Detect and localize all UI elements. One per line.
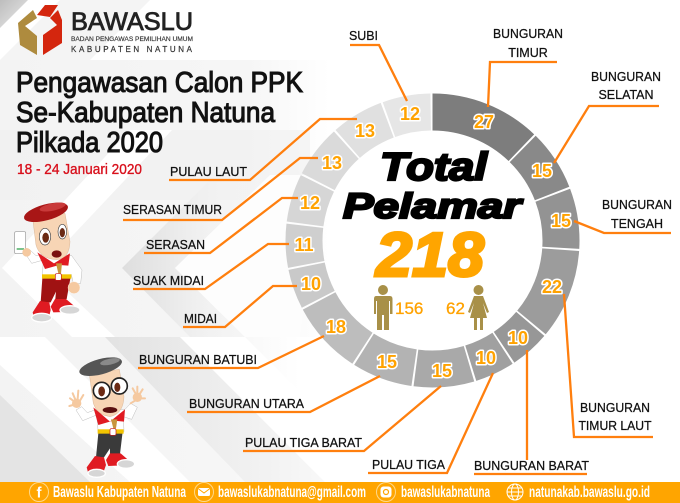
segment values: 12 xyxy=(300,193,320,213)
segment values: 15 xyxy=(532,161,552,181)
label: Midai: MIDAI xyxy=(184,312,217,326)
label: Bunguran Selatan: SELATAN xyxy=(598,88,654,102)
icon: male applicants xyxy=(374,285,392,330)
heading: Total Pelamar xyxy=(343,146,524,226)
label: Subi xyxy=(349,29,407,101)
segment values: 18 xyxy=(326,317,346,337)
title: Se-Kabupaten Natuna xyxy=(16,97,276,129)
segment values: 15 xyxy=(551,211,571,231)
label: Bunguran Tengah: BUNGURAN xyxy=(602,198,672,212)
footer: instagram name: bawaslukabnatuna xyxy=(401,484,490,501)
label: Bunguran Timur: BUNGURAN xyxy=(493,27,563,41)
label: Pulau Tiga Barat xyxy=(243,386,441,451)
label: Bunguran Selatan: BUNGURAN xyxy=(591,70,661,84)
female count: 62 xyxy=(446,299,465,318)
label: Bunguran Timur Laut: TIMUR LAUT xyxy=(578,419,652,433)
icon: facebook xyxy=(30,482,48,502)
total value: 218 xyxy=(375,221,485,290)
segment values: 10 xyxy=(508,328,528,348)
label: Serasan Timur: SERASAN TIMUR xyxy=(123,203,222,217)
date: 18 - 24 Januari 2020 xyxy=(17,161,142,178)
segment values: 11 xyxy=(294,235,314,255)
logo region: KABUPATEN NATUNA xyxy=(71,45,193,54)
title xyxy=(16,67,304,159)
segment values: 15 xyxy=(432,361,452,381)
title: Pilkada 2020 xyxy=(16,127,163,159)
heading: Total Pelamar: Pelamar xyxy=(343,187,524,226)
label: Midai xyxy=(183,286,297,327)
label: Bunguran Utara xyxy=(187,376,380,412)
label: Pulau Laut xyxy=(169,119,357,180)
icon: facebook: f xyxy=(36,484,42,502)
male count: 156 xyxy=(395,299,423,318)
label: Subi: SUBI xyxy=(349,29,378,43)
label: Pulau Tiga Barat: PULAU TIGA BARAT xyxy=(245,436,362,450)
segment values: 27 xyxy=(474,112,494,132)
segment values: 13 xyxy=(322,153,342,173)
label: Serasan: SERASAN xyxy=(146,238,205,252)
label: Bunguran Selatan xyxy=(554,70,661,163)
logo wordmark: BAWASLU xyxy=(71,8,193,36)
label: Bunguran Timur xyxy=(488,27,563,107)
label: Bunguran Tengah xyxy=(574,198,672,233)
label: Bunguran Timur Laut: BUNGURAN xyxy=(580,401,650,415)
label: Serasan Timur xyxy=(123,158,318,220)
label: Pulau Laut: PULAU LAUT xyxy=(170,165,247,179)
label: Suak Midai xyxy=(133,244,289,289)
label: Serasan xyxy=(144,198,298,253)
label: Bunguran Barat xyxy=(474,350,589,474)
mascot: red beret with phone xyxy=(15,199,82,322)
label: Pulau Tiga xyxy=(368,373,493,473)
segment values: 13 xyxy=(355,121,375,141)
icon: instagram xyxy=(376,482,396,502)
segment values: 10 xyxy=(476,348,496,368)
footer: email: bawaslukabnatuna@gmail.com xyxy=(218,484,366,501)
label: Bunguran Batubi xyxy=(138,336,324,368)
label: Pulau Tiga: PULAU TIGA xyxy=(372,458,446,472)
segment values: 12 xyxy=(400,104,420,124)
segment values xyxy=(294,104,571,381)
label: Bunguran Utara: BUNGURAN UTARA xyxy=(189,397,305,411)
icon: mail xyxy=(194,482,214,502)
donut chart: applicants per district xyxy=(304,112,561,369)
segment values: 15 xyxy=(377,352,397,372)
label: Bunguran Batubi: BUNGURAN BATUBI xyxy=(139,353,257,367)
label: Suak Midai: SUAK MIDAI xyxy=(133,274,204,288)
footer bar xyxy=(0,482,680,503)
label: Bunguran Timur: TIMUR xyxy=(508,46,548,60)
title: Pengawasan Calon PPK xyxy=(16,67,304,99)
label: Bunguran Tengah: TENGAH xyxy=(611,217,663,231)
footer: facebook name: Bawaslu Kabupaten Natuna xyxy=(53,484,186,501)
icon: globe xyxy=(507,484,523,500)
icon: female applicants xyxy=(468,285,489,330)
segment values: 22 xyxy=(542,277,562,297)
label: Bunguran Barat: BUNGURAN BARAT xyxy=(474,459,589,473)
logo subtitle: BADAN PENGAWAS PEMILIHAN UMUM xyxy=(71,36,193,43)
logo xyxy=(18,5,193,55)
label: Bunguran Timur Laut xyxy=(564,294,653,437)
heading: Total Pelamar: Total xyxy=(380,146,488,189)
logo icon xyxy=(18,5,62,55)
mascot: grey beret with glasses xyxy=(69,354,145,477)
background pattern xyxy=(0,0,390,482)
segment values: 10 xyxy=(301,274,321,294)
